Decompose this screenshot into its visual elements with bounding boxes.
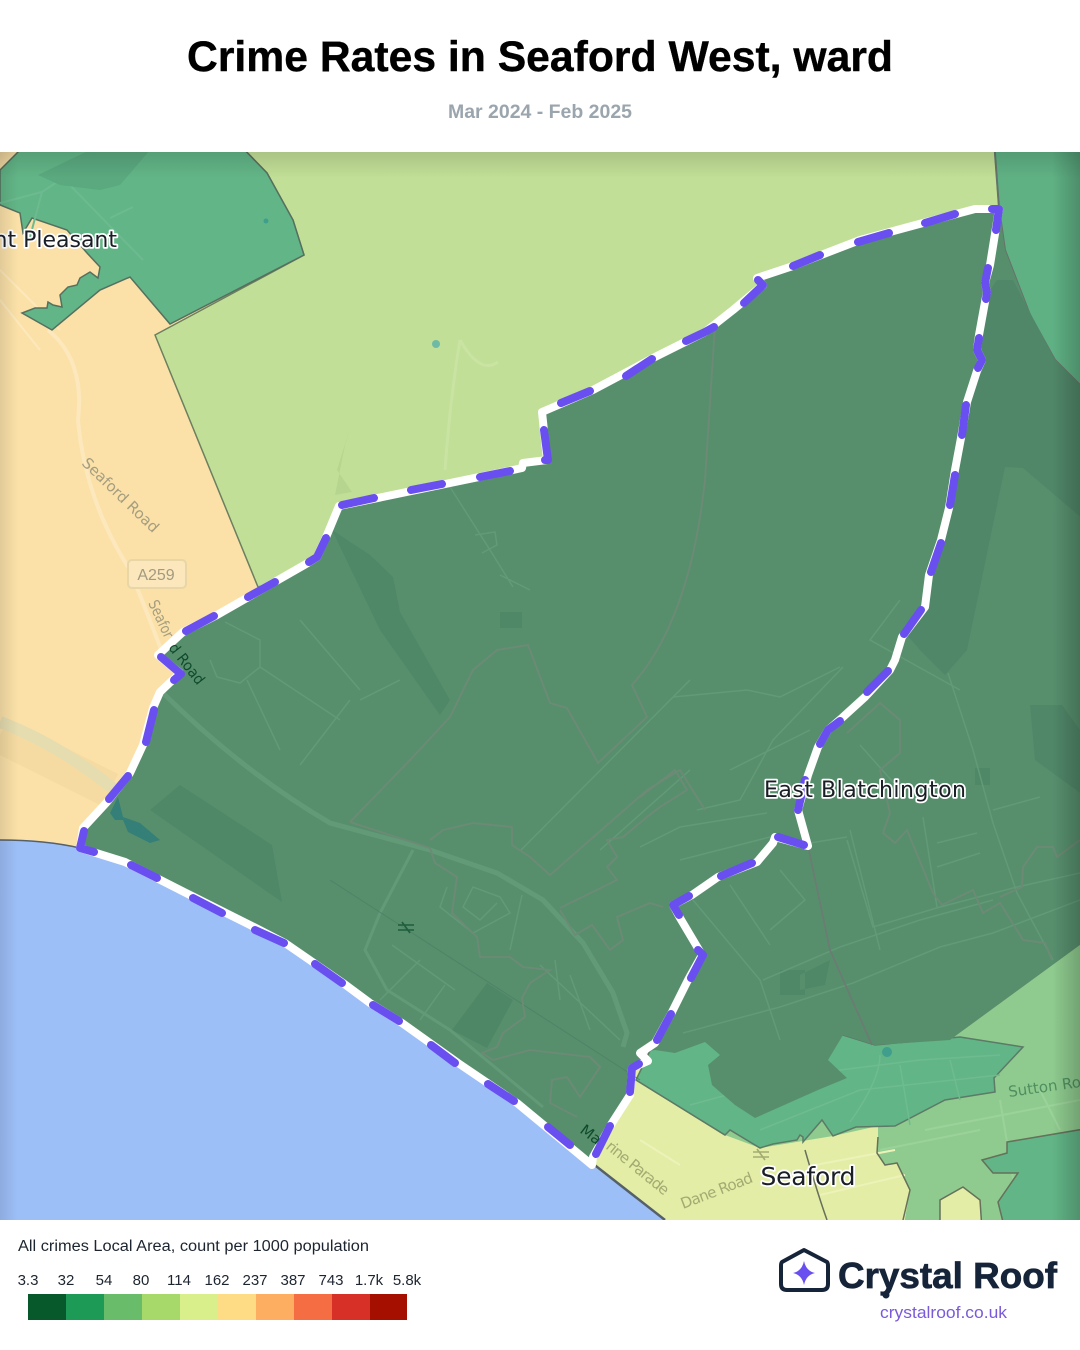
road: A259 on tan area	[0, 270, 165, 790]
woodland patches in ward	[160, 790, 281, 901]
subtitle: date range: Mar 2024 - Feb 2025	[448, 102, 632, 123]
region: south light green	[726, 945, 1080, 1220]
road label: Seaford Road in ward: d Road	[165, 639, 209, 688]
sea	[0, 840, 665, 1230]
road label: Seaford Road north: Seaford Road	[78, 454, 163, 536]
region: central mid green	[635, 1035, 1024, 1149]
ward boundary	[80, 209, 999, 1165]
road label: Seaford Road south: Seafor	[144, 597, 178, 642]
legend tick labels	[18, 1272, 422, 1289]
legend tick labels: 5.8k	[393, 1272, 422, 1289]
legend	[18, 1238, 422, 1320]
road label: Marine Parade: rine Parade	[602, 1137, 673, 1199]
logo: Crystal Roof	[781, 1250, 1058, 1322]
roads in ward	[160, 487, 1080, 1107]
road sign: A259	[128, 560, 186, 588]
map area: tan base region	[0, 152, 1080, 1071]
icon: railway station seaford	[753, 1149, 769, 1160]
logo url: crystalroof.co.uk	[880, 1303, 1008, 1322]
region: ward fill	[80, 209, 999, 1165]
road label: Marine Parade in ward: Ma	[577, 1121, 605, 1149]
legend tick labels: 162	[204, 1272, 230, 1289]
legend tick labels: 3.3	[18, 1272, 38, 1289]
legend tick labels: 237	[242, 1272, 268, 1289]
logo key dot	[882, 1292, 890, 1298]
legend tick labels: 80	[133, 1272, 149, 1289]
legend colour scale	[28, 1294, 407, 1320]
region: seaford yellow green	[596, 1070, 910, 1220]
icon: house with star	[781, 1250, 828, 1290]
railway line	[330, 880, 640, 1080]
legend tick labels: 54	[96, 1272, 112, 1289]
label: Seaford: Seaford	[760, 1162, 856, 1191]
legend tick labels: 114	[167, 1272, 191, 1289]
road label: Dane Road: Dane Road	[678, 1169, 755, 1213]
legend tick labels: 1.7k	[355, 1272, 384, 1289]
legend tick labels: 387	[280, 1272, 306, 1289]
label: East Blatchington: East Blatchington	[764, 778, 966, 803]
map edge shading	[0, 152, 1080, 170]
lake	[110, 797, 160, 843]
title: Crime Rates in Seaford West, ward	[187, 33, 893, 81]
region: north-west mid green	[0, 140, 304, 330]
region: north light green	[155, 140, 999, 587]
legend tick labels: 743	[318, 1272, 344, 1289]
logo wordmark: Crystal Roof	[838, 1255, 1058, 1296]
region: north-east mid green	[994, 140, 1080, 395]
icon: railway station west	[398, 922, 414, 933]
region: south-east mid green	[982, 1128, 1080, 1230]
legend title: All crimes Local Area, count per 1000 population	[18, 1238, 369, 1255]
legend tick labels: 32	[58, 1272, 74, 1289]
region: eastern dark green	[640, 208, 1080, 1118]
parish boundaries in ward	[350, 325, 1080, 1117]
road sign: A259: A259	[137, 567, 175, 584]
